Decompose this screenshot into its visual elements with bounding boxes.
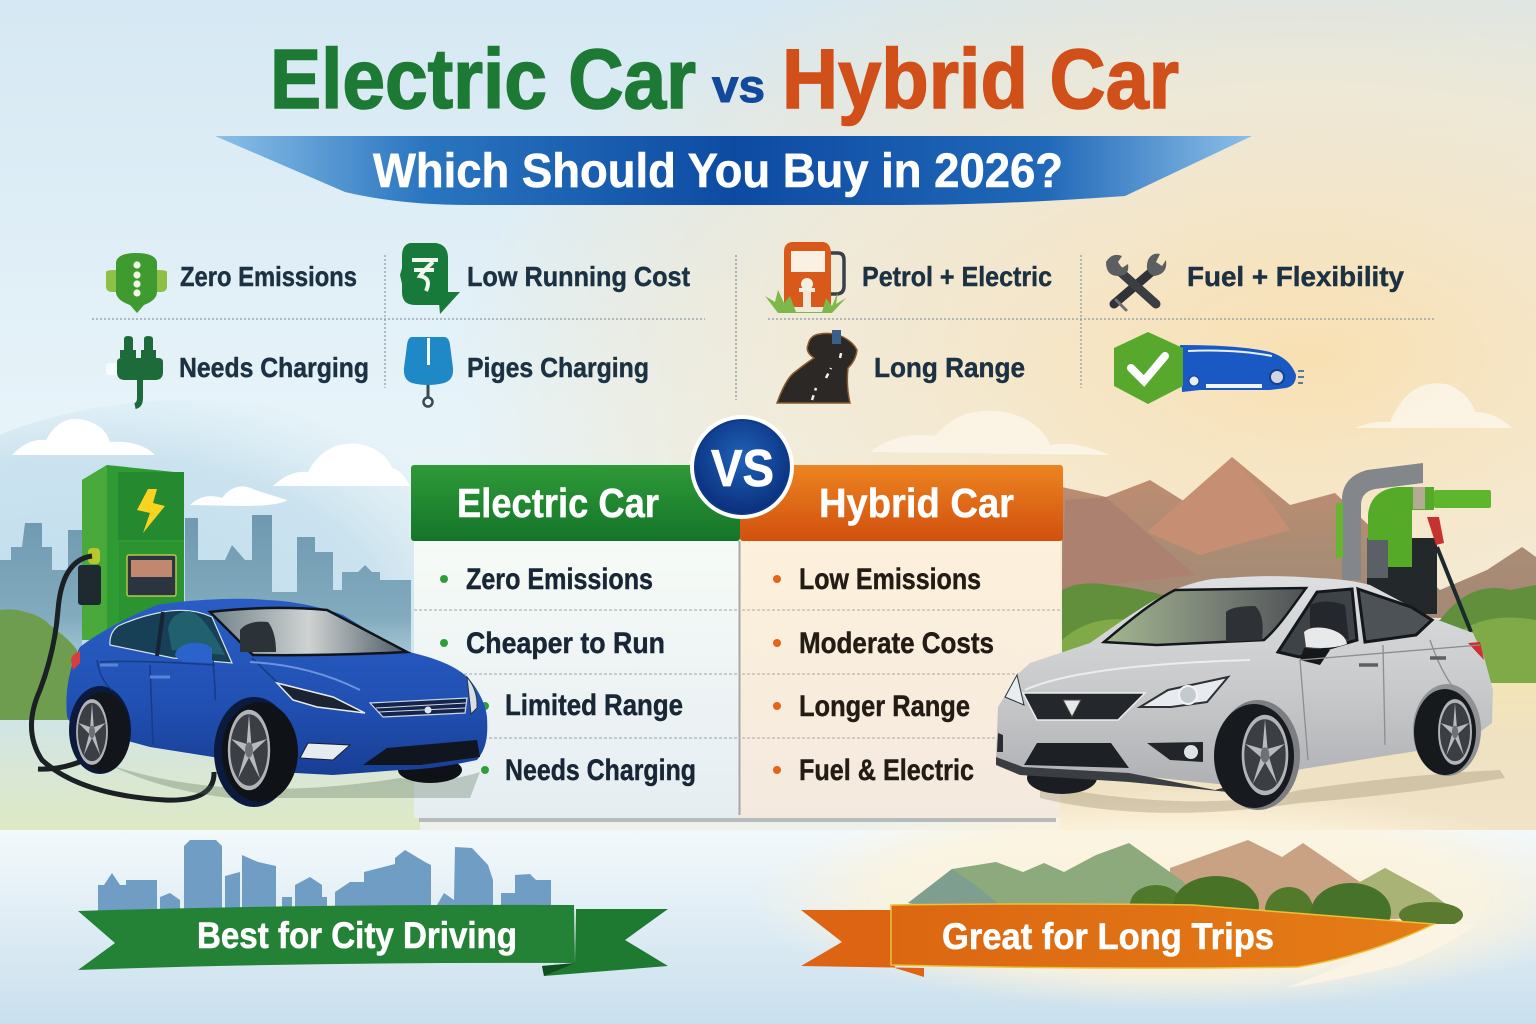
footer right: mountains and ribbon — [801, 840, 1477, 988]
footer panel — [0, 790, 1536, 1024]
windshield — [210, 608, 407, 655]
title: Electric Car — [270, 32, 696, 126]
clouds left — [12, 419, 410, 506]
scene background — [0, 383, 1536, 1024]
rear wheel — [1413, 684, 1481, 776]
ground band — [0, 683, 1536, 832]
mirror — [1304, 628, 1347, 648]
title: Hybrid Car — [782, 32, 1179, 126]
city skyline left — [0, 515, 411, 720]
label: fuel + flexibility: Fuel + Flexibility — [1187, 261, 1404, 292]
mountains — [908, 840, 1463, 941]
trees right — [1062, 583, 1536, 685]
label: zero emissions: Zero Emissions — [180, 261, 357, 292]
subtitle banner: Which Should You Buy in 2026? — [373, 145, 1063, 198]
hybrid column: Longer Range — [799, 690, 970, 723]
mountains right — [1062, 457, 1536, 620]
silver car — [996, 576, 1505, 813]
icon: charging pin — [404, 337, 453, 406]
electric column — [411, 465, 740, 818]
ribbon: Best for City Driving — [197, 915, 517, 956]
grille — [1023, 693, 1145, 720]
footer left: city and ribbon — [78, 840, 668, 976]
side windows — [110, 610, 232, 663]
door lines — [97, 658, 278, 745]
icon: winding road — [777, 330, 857, 403]
fog light — [1147, 742, 1203, 762]
side windows — [1278, 589, 1357, 657]
feature grid: hybrid — [765, 242, 1436, 404]
badge — [1063, 700, 1081, 717]
hybrid pump — [1336, 463, 1491, 632]
label: low running cost: Low Running Cost — [467, 261, 690, 292]
electric column: Electric Car — [457, 480, 659, 526]
title — [270, 32, 1179, 126]
label: needs charging: Needs Charging — [179, 352, 369, 383]
ribbon: Great for Long Trips — [942, 916, 1274, 957]
mirror — [175, 643, 212, 663]
label: petrol + electric: Petrol + Electric — [862, 261, 1052, 292]
hybrid column: Hybrid Car — [819, 480, 1014, 526]
headlight — [277, 683, 365, 713]
feature grid: electric — [92, 243, 705, 406]
vs badge: VS — [711, 440, 774, 498]
electric column: Zero Emissions — [466, 563, 653, 596]
ribbon — [801, 904, 1477, 988]
door lines — [1300, 640, 1480, 760]
center divider — [736, 255, 737, 978]
ev charger station — [31, 465, 214, 800]
trees left — [0, 609, 77, 720]
icon: fuel pump — [765, 242, 846, 313]
vs badge — [690, 415, 794, 519]
icon: check shield with key — [1114, 332, 1304, 404]
taillight — [71, 651, 80, 670]
icon: rupee low cost — [400, 243, 460, 314]
lower intake — [1024, 743, 1129, 768]
bottom sill — [996, 757, 1296, 792]
comparison table — [411, 465, 1063, 822]
icon: plug — [106, 336, 163, 406]
clouds right — [870, 383, 1512, 455]
electric column: Needs Charging — [505, 754, 696, 787]
fog light — [300, 743, 350, 760]
hybrid column — [740, 465, 1063, 818]
hybrid column: Low Emissions — [799, 563, 981, 596]
title: vs — [712, 60, 765, 112]
electric column: Limited Range — [505, 689, 683, 722]
ribbon — [78, 905, 668, 976]
blue car — [66, 599, 487, 807]
lower front tire — [398, 757, 462, 783]
label: long range: Long Range — [874, 352, 1025, 383]
headlight — [1140, 677, 1228, 707]
windshield — [1104, 588, 1306, 645]
hybrid column: Moderate Costs — [799, 627, 994, 660]
label: piges charging: Piges Charging — [467, 352, 649, 383]
lower front tire — [1027, 762, 1097, 794]
hybrid column: Fuel & Electric — [799, 754, 974, 787]
taillight — [1468, 642, 1484, 660]
subtitle banner — [215, 136, 1252, 205]
icon: zero emissions shield — [106, 253, 167, 313]
grille — [370, 698, 467, 717]
icon: tools — [1106, 254, 1166, 310]
wheel arch and front wheel — [1214, 700, 1300, 810]
skyline — [98, 840, 551, 912]
electric column: Cheaper to Run — [466, 627, 665, 660]
wheel arch and front wheel — [214, 697, 298, 807]
rear wheel — [69, 686, 131, 774]
lower intake — [363, 740, 480, 765]
